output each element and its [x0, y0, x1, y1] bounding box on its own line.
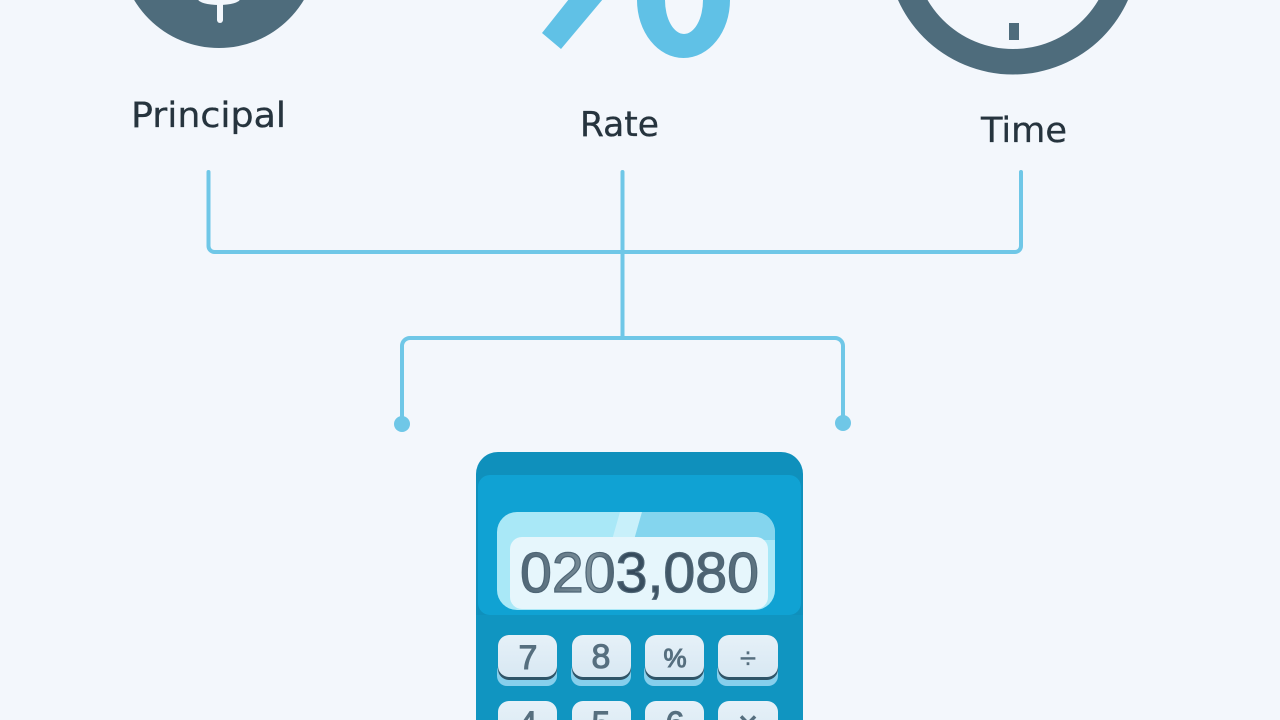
keypad row 1: [497, 635, 778, 686]
keypad row 2: [498, 701, 778, 720]
calculator display: 0203,080: [520, 541, 759, 605]
keypad row 1: ÷: [740, 642, 756, 675]
icon: principal coin: [134, 0, 304, 48]
keypad row 1: 7: [519, 639, 537, 677]
icon: percent symbol: [542, 0, 730, 58]
calculator: [476, 452, 803, 720]
connector: lower bracket with end dots: [394, 338, 851, 432]
label: Time: Time: [980, 111, 1067, 151]
label: Principal: Principal: [131, 96, 286, 136]
calculator display: [497, 512, 775, 610]
connector: upper bracket: [208, 172, 1021, 337]
keypad row 1: 8: [592, 638, 610, 676]
keypad row 1: %: [663, 643, 687, 673]
icon: clock: [887, 0, 1139, 74]
label: Rate: Rate: [580, 105, 659, 145]
